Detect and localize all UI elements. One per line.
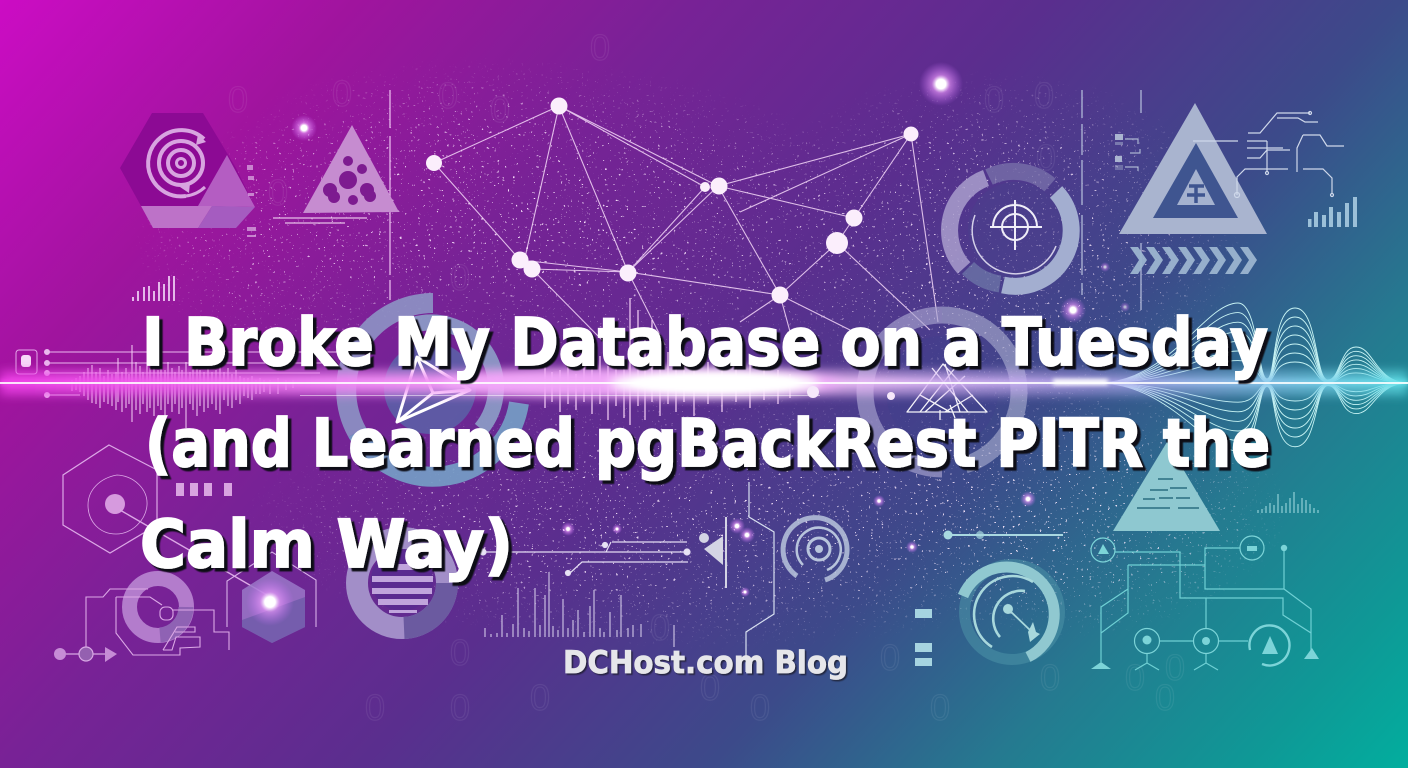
beam nodes	[807, 386, 895, 400]
faint binary digits: 0	[650, 607, 670, 648]
faint binary digits: 0	[365, 687, 385, 728]
large ring left of centre	[346, 303, 519, 477]
icon: triangle with dots	[273, 125, 399, 223]
circuit node circles	[1091, 536, 1289, 665]
leader line with nodes lower right	[944, 530, 1063, 540]
faint binary digits: 0	[268, 172, 288, 213]
left waveform	[72, 345, 293, 428]
connector polyline bottom centre	[746, 482, 774, 672]
faint binary digits: 0	[1165, 647, 1185, 688]
faint binary digits: 0	[450, 632, 470, 673]
icon: small rounded square node	[16, 350, 37, 374]
leader lines left	[44, 350, 340, 398]
faint binary digits: 0	[1036, 137, 1056, 178]
circuit node fills	[1091, 544, 1319, 669]
icon: glowing hexagon	[227, 552, 316, 643]
network edges	[434, 106, 938, 350]
icon: hexagon with concentric target	[120, 113, 255, 228]
brand caption: DCHost.com Blog	[563, 645, 848, 681]
chevron row	[1130, 247, 1257, 274]
central waveform	[545, 298, 790, 425]
faint binary digits: 0	[880, 637, 900, 678]
faint binary digits: 0	[490, 89, 510, 130]
bar chart bottom centre	[485, 572, 674, 647]
circuit diagram lower right	[1091, 536, 1319, 670]
icon: hexagon outline lower left	[63, 445, 267, 595]
glow orb: top left	[291, 115, 317, 141]
icon: radar ring lower right	[963, 564, 1060, 660]
faint binary digits: 0	[228, 79, 248, 120]
faint binary digits	[228, 27, 1185, 728]
paired blocks right of bottom centre	[915, 609, 932, 666]
starfield	[138, 61, 1282, 646]
mini bar chart left	[133, 276, 174, 301]
faint binary digits: 0	[450, 257, 470, 298]
faint binary digits: 0	[590, 27, 610, 68]
icon: net triangle	[907, 364, 987, 420]
glow orb: top centre	[919, 62, 963, 106]
faint binary digits: 0	[930, 687, 950, 728]
horizontal leader lines bottom centre	[480, 542, 690, 576]
faint binary digits: 0	[438, 75, 458, 116]
title: Calm Way)	[140, 506, 513, 583]
small stacked blocks top right	[1115, 134, 1140, 171]
faint binary digits: 0	[1040, 657, 1060, 698]
icon: donut lower left	[130, 578, 186, 636]
faint binary digits: 0	[1034, 75, 1054, 116]
spectrum bars lower right	[1258, 492, 1318, 513]
faint binary digits: 0	[450, 687, 470, 728]
small pink sparkles	[561, 262, 1130, 597]
circuit traces lower left	[86, 589, 229, 655]
arrow connector lower left	[54, 647, 117, 662]
faint binary digits: 0	[1155, 677, 1175, 718]
faint binary digits: 0	[750, 687, 770, 728]
faint binary digits: 0	[530, 677, 550, 718]
four small squares	[176, 483, 232, 496]
faint binary digits: 0	[332, 73, 352, 114]
icon: white arrow outline	[397, 357, 470, 422]
small stacked glyphs by the hexagon	[247, 165, 256, 237]
dashed vertical rule left	[389, 90, 391, 300]
faint binary digits: 0	[700, 667, 720, 708]
glow orb: right	[1060, 297, 1086, 323]
icon: large triangle top right	[1119, 103, 1267, 234]
dashed vertical rules right	[1082, 90, 1141, 310]
right waveform, nested sine lobes	[1100, 303, 1408, 451]
icon: target ring top right	[950, 171, 1071, 286]
icon: triangle lower right	[1113, 442, 1220, 531]
icon: donut with striped disc	[357, 538, 447, 628]
circuit traces top right	[1193, 112, 1344, 198]
horizontal light beam	[0, 369, 1408, 397]
icon: small concentric ring bottom centre	[783, 518, 847, 580]
icon: left pointing triangle and vertical bar	[699, 517, 727, 588]
title	[140, 304, 1270, 583]
large ring right of centre	[865, 315, 1019, 469]
mini bar chart top right	[1308, 197, 1357, 227]
network nodes	[426, 98, 918, 304]
faint binary digits: 0	[1125, 657, 1145, 698]
faint binary digits: 0	[984, 79, 1004, 120]
title: I Broke My Database on a Tuesday	[142, 304, 1268, 381]
network graph	[426, 98, 938, 350]
title: (and Learned pgBackRest PITR the	[145, 405, 1270, 482]
